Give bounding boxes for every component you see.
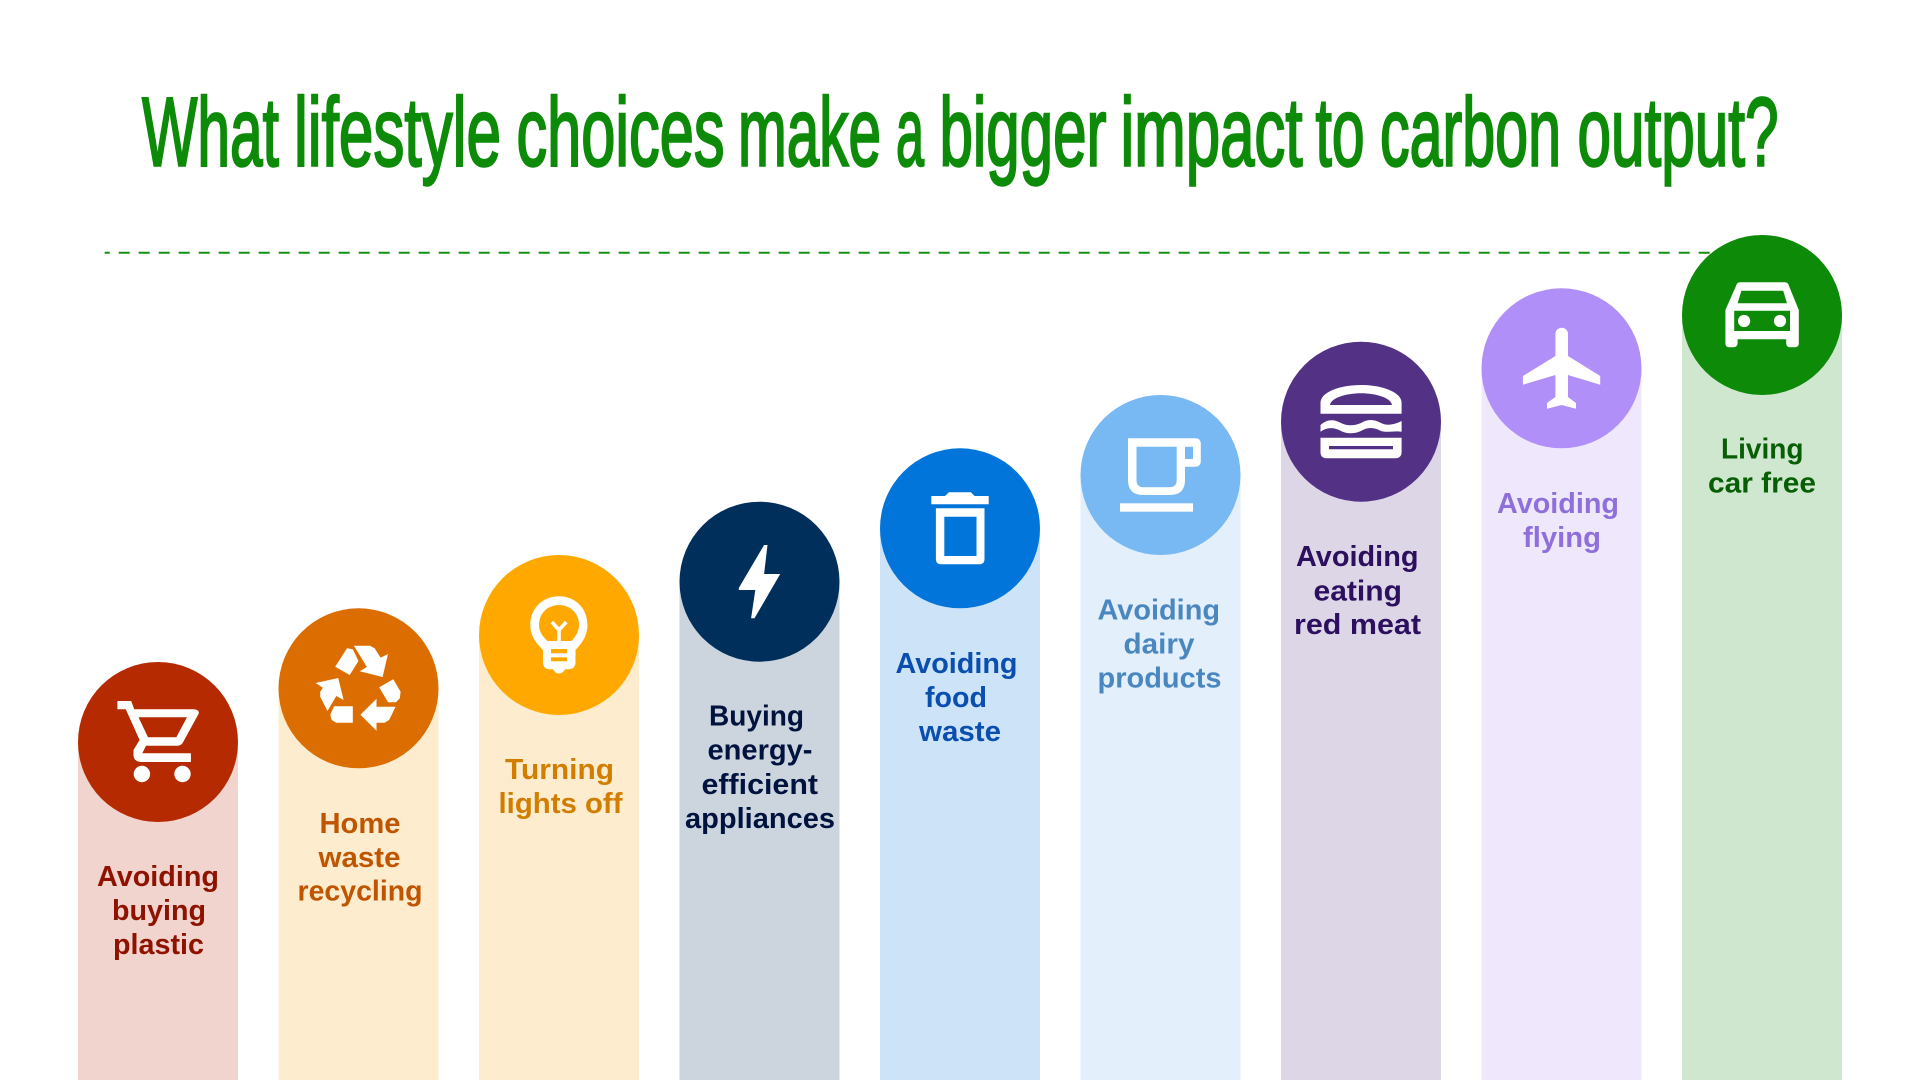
title: output? — [1578, 78, 1778, 186]
label: waste — [317, 842, 400, 874]
icon circle: navy — [680, 502, 840, 662]
icon circle: red — [78, 662, 238, 822]
label: Avoiding — [896, 648, 1018, 680]
column: avoiding flying — [1482, 288, 1642, 1080]
label: Buying — [709, 700, 804, 732]
icon: recycling arrows — [316, 646, 401, 731]
column: buying energy-efficient appliances — [680, 502, 840, 1080]
label — [1497, 488, 1619, 554]
label — [1708, 434, 1816, 500]
title: lifestyle — [294, 78, 501, 186]
icon: lightning bolt — [739, 545, 780, 618]
bar — [880, 528, 1040, 1080]
column: turning lights off — [479, 555, 639, 1080]
label — [685, 700, 835, 835]
icon circle: orange — [278, 608, 438, 768]
column: living car free — [1682, 235, 1842, 1080]
label: appliances — [685, 803, 835, 835]
bar — [680, 582, 840, 1080]
label: Avoiding — [1296, 541, 1418, 573]
title: bigger — [940, 78, 1106, 186]
column: avoiding eating red meat — [1281, 342, 1441, 1080]
icon: airplane — [1523, 328, 1600, 409]
label: food — [925, 682, 987, 714]
label — [1294, 541, 1421, 641]
label: lights off — [498, 788, 623, 820]
label: buying — [112, 895, 206, 927]
icon circle: amber — [479, 555, 639, 715]
label — [498, 754, 623, 820]
icon: shopping cart — [117, 701, 199, 782]
label — [896, 648, 1018, 748]
icon circle: purple — [1281, 342, 1441, 502]
title — [142, 78, 1778, 186]
column: home waste recycling — [278, 608, 438, 1080]
icon: car — [1725, 282, 1799, 347]
icon: light bulb — [530, 596, 587, 674]
label — [298, 808, 422, 908]
label: red meat — [1294, 609, 1421, 641]
title: carbon — [1380, 78, 1561, 186]
icon: coffee cup — [1120, 438, 1201, 512]
label: flying — [1523, 522, 1601, 554]
label — [1098, 594, 1222, 694]
bar — [479, 635, 639, 1080]
label — [97, 861, 219, 961]
label: efficient — [702, 769, 818, 801]
label: Home — [320, 808, 400, 840]
title: to — [1316, 78, 1364, 186]
icon circle: blue — [880, 448, 1040, 608]
icon circle: green — [1682, 235, 1842, 395]
label: Avoiding — [97, 861, 219, 893]
label: products — [1098, 662, 1222, 694]
icon circle: light blue — [1080, 395, 1240, 555]
icon circle: lavender — [1482, 288, 1642, 448]
label: waste — [918, 716, 1001, 748]
label: car free — [1708, 468, 1816, 500]
column: avoiding food waste — [880, 448, 1040, 1080]
bar — [1281, 422, 1441, 1080]
title: What — [142, 78, 279, 186]
title: a — [896, 78, 924, 186]
column: avoiding buying plastic — [78, 662, 238, 1080]
label: Turning — [505, 754, 614, 786]
label: energy- — [708, 734, 812, 766]
title: impact — [1120, 78, 1303, 186]
bar — [278, 688, 438, 1080]
title: choices — [516, 78, 724, 186]
title: make — [738, 78, 881, 186]
icon: burger — [1320, 385, 1402, 458]
label: recycling — [298, 876, 422, 908]
bar — [1482, 368, 1642, 1080]
label: Living — [1721, 434, 1804, 466]
label: Avoiding — [1098, 594, 1220, 626]
label: dairy — [1124, 628, 1194, 660]
label: eating — [1314, 576, 1402, 608]
label: plastic — [113, 929, 204, 961]
bar — [1080, 475, 1240, 1080]
bar — [78, 742, 238, 1080]
icon: trash can — [931, 492, 989, 564]
bar — [1682, 315, 1842, 1080]
label: Avoiding — [1497, 488, 1619, 520]
column: avoiding dairy products — [1080, 395, 1240, 1080]
